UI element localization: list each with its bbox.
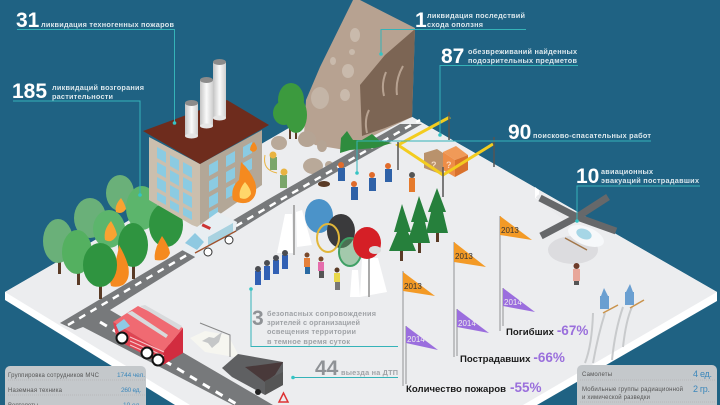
callout: 10 air evacuations [575,165,700,223]
callout: 31 fires [16,9,176,125]
skiers with tracks [585,284,644,363]
factory building [143,100,269,228]
callout: 185 vegetation fires [12,80,144,197]
callout: 1 landslide: схода оползня [427,20,483,29]
firefighters with hose [264,152,288,188]
panel: ground forces: Группировка сотрудников МЧС [8,373,100,379]
panel: air forces: и химической разведки [582,394,650,401]
callout: 87 suspicious items: 87 [441,45,464,68]
flags: injured: 2014 [458,319,476,328]
flags: fires: 2014 [407,335,425,344]
crashed car [190,323,283,395]
callout: 3 safe escorts: зрителей с организацией [267,318,360,327]
callout: 185 vegetation fires: растительности [52,92,113,101]
flags: dead: 2013 [501,226,519,235]
flags: injured: 2013 [455,252,473,261]
callout: 44 road accidents: выезда на ДТП [341,368,398,377]
callout: 3 safe escorts: безопасных сопровождения [267,309,376,318]
suspicious boxes: ? [446,160,452,170]
callout: 3 safe escorts [249,287,398,346]
callout: 185 vegetation fires: 185 [12,80,47,103]
callout: 1 landslide: 1 [415,9,427,32]
callout: 31 fires: ликвидация техногенных пожаров [41,20,174,29]
callout: 1 landslide [379,9,526,56]
ambulance [182,212,237,258]
police line [255,250,288,285]
mountain landslide [271,0,415,174]
panel: air forces: Мобильные группы радиационной [582,386,683,393]
road network [60,120,422,405]
callout: 90 rescue operations: поисково-спасательных работ [533,131,651,140]
callout: 3 safe escorts: 3 [252,307,264,330]
callout: 44 road accidents: 44 [315,357,339,380]
warning triangle [279,393,288,402]
stat: dead -67%: Погибших-67% [506,323,588,338]
flags: fires: 2013 [404,282,422,291]
panel: air forces: 2 гр. [693,384,710,394]
callout: 10 air evacuations: 10 [576,165,599,188]
callout: 185 vegetation fires: ликвидаций возгорания [52,83,144,92]
callout: 31 fires: 31 [16,9,40,32]
chimneys [185,59,226,138]
panel: air forces [577,365,717,405]
spectators [304,252,340,290]
panel: air forces: 4 ед. [693,369,712,379]
stat: injured -66%: Пострадавших-66% [460,350,565,365]
callout: 10 air evacuations: эвакуаций пострадавших [601,176,699,185]
suspicious boxes: ? [431,160,436,170]
callout: 1 landslide: ликвидация последствий [427,11,525,20]
fire truck [113,305,183,366]
hazard tape [398,112,494,197]
street lamp beams [277,205,387,297]
panel: ground forces: 260 ед. [121,387,141,394]
callout: 44 road accidents [291,357,398,380]
callout: 90 rescue operations: 90 [508,121,531,144]
stat: fires -55%: Количество пожаров -55% [406,380,542,395]
callout: 90 rescue operations [355,121,651,175]
rescue workers [318,162,415,200]
suspicious boxes [424,146,468,177]
panel: ground forces [5,366,146,405]
evacuee person [573,263,580,285]
fire tree cluster [43,175,183,299]
callout: 3 safe escorts: в темное время суток [267,337,350,346]
spruce trees [389,188,448,261]
callout: 87 suspicious items [438,45,578,137]
flags: dead: 2014 [504,298,522,307]
panel: ground forces: Наземная техника [8,388,63,394]
olympic rings stage [305,199,381,266]
isometric platform [5,87,717,405]
green fallen tree [340,131,392,153]
tree near mountain [273,83,307,139]
flags: fires [402,271,438,386]
flags: dead [499,216,535,331]
callout: 3 safe escorts: освещения территории [267,327,356,336]
callout: 10 air evacuations: авиационных [601,167,653,176]
callout: 87 suspicious items: обезвреживаний найденных [468,47,577,56]
panel: air forces: Самолеты [582,372,612,378]
helicopter [535,187,616,264]
panel: ground forces: 1744 чел. [117,372,145,379]
callout: 87 suspicious items: подозрительных предметов [468,56,578,65]
flags: injured [453,242,489,357]
